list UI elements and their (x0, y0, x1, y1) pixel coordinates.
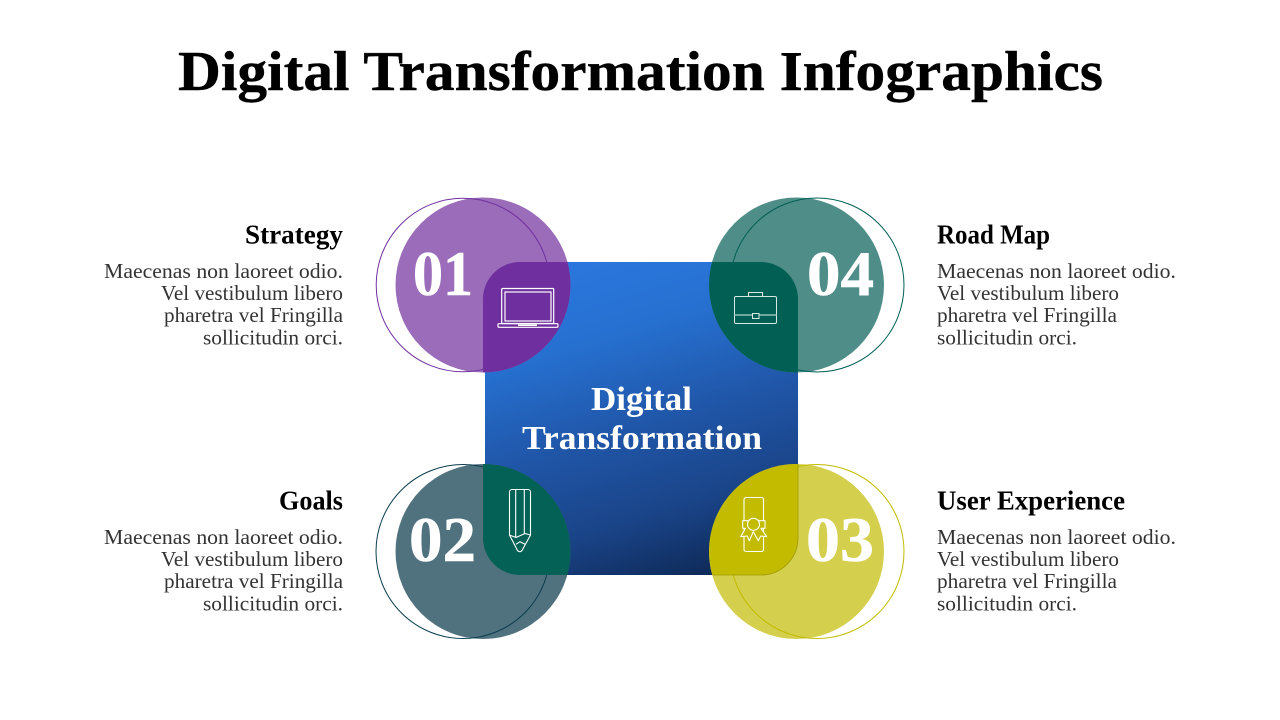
icon: laptop (498, 288, 558, 327)
text block: Strategy (104, 220, 344, 350)
panel: 04 circle (705, 198, 904, 372)
text block: Road Map: Maecenas non laoreet odio. (937, 259, 1176, 283)
text block: User Experience: Vel vestibulum libero (937, 547, 1119, 571)
text block: User Experience: sollicitudin orci. (937, 592, 1077, 616)
panel: 02 circle (376, 460, 575, 639)
panel: 03 circle (705, 460, 904, 639)
text block: Goals (104, 486, 344, 616)
text block: Strategy: Vel vestibulum libero (161, 281, 343, 305)
text block: User Experience: pharetra vel Fringilla (937, 569, 1118, 593)
central gradient square (485, 262, 798, 575)
icon: briefcase (734, 292, 776, 324)
icon: certificate (741, 498, 767, 552)
text block: Road Map: pharetra vel Fringilla (937, 303, 1118, 327)
text block: Goals: sollicitudin orci. (203, 592, 343, 616)
text block: Road Map: sollicitudin orci. (937, 326, 1077, 350)
number 03: 03 (806, 504, 874, 575)
text block: Strategy: sollicitudin orci. (203, 326, 343, 350)
icon: pencil (510, 490, 530, 552)
center label (522, 381, 762, 457)
text block: Road Map: Vel vestibulum libero (937, 281, 1119, 305)
text block: Goals: Maecenas non laoreet odio. (104, 525, 343, 549)
text block: Goals: Vel vestibulum libero (161, 547, 343, 571)
text block: Goals: pharetra vel Fringilla (164, 569, 344, 593)
number 01: 01 (413, 238, 473, 309)
text block: Strategy: Strategy (245, 220, 344, 250)
center label: Transformation (522, 420, 762, 457)
text block: Strategy: pharetra vel Fringilla (164, 303, 344, 327)
text block: Road Map (937, 220, 1176, 350)
number 04: 04 (807, 238, 874, 309)
text block: User Experience: User Experience (937, 486, 1125, 516)
panel: 01 circle (376, 198, 575, 372)
number 02: 02 (409, 504, 476, 575)
text block: User Experience: Maecenas non laoreet odio. (937, 525, 1176, 549)
title: Digital Transformation Infographics (178, 41, 1103, 103)
text block: Goals: Goals (279, 486, 343, 516)
text block: User Experience (937, 486, 1176, 616)
text block: Strategy: Maecenas non laoreet odio. (104, 259, 343, 283)
text block: Road Map: Road Map (937, 220, 1050, 250)
center label: Digital (591, 381, 692, 418)
